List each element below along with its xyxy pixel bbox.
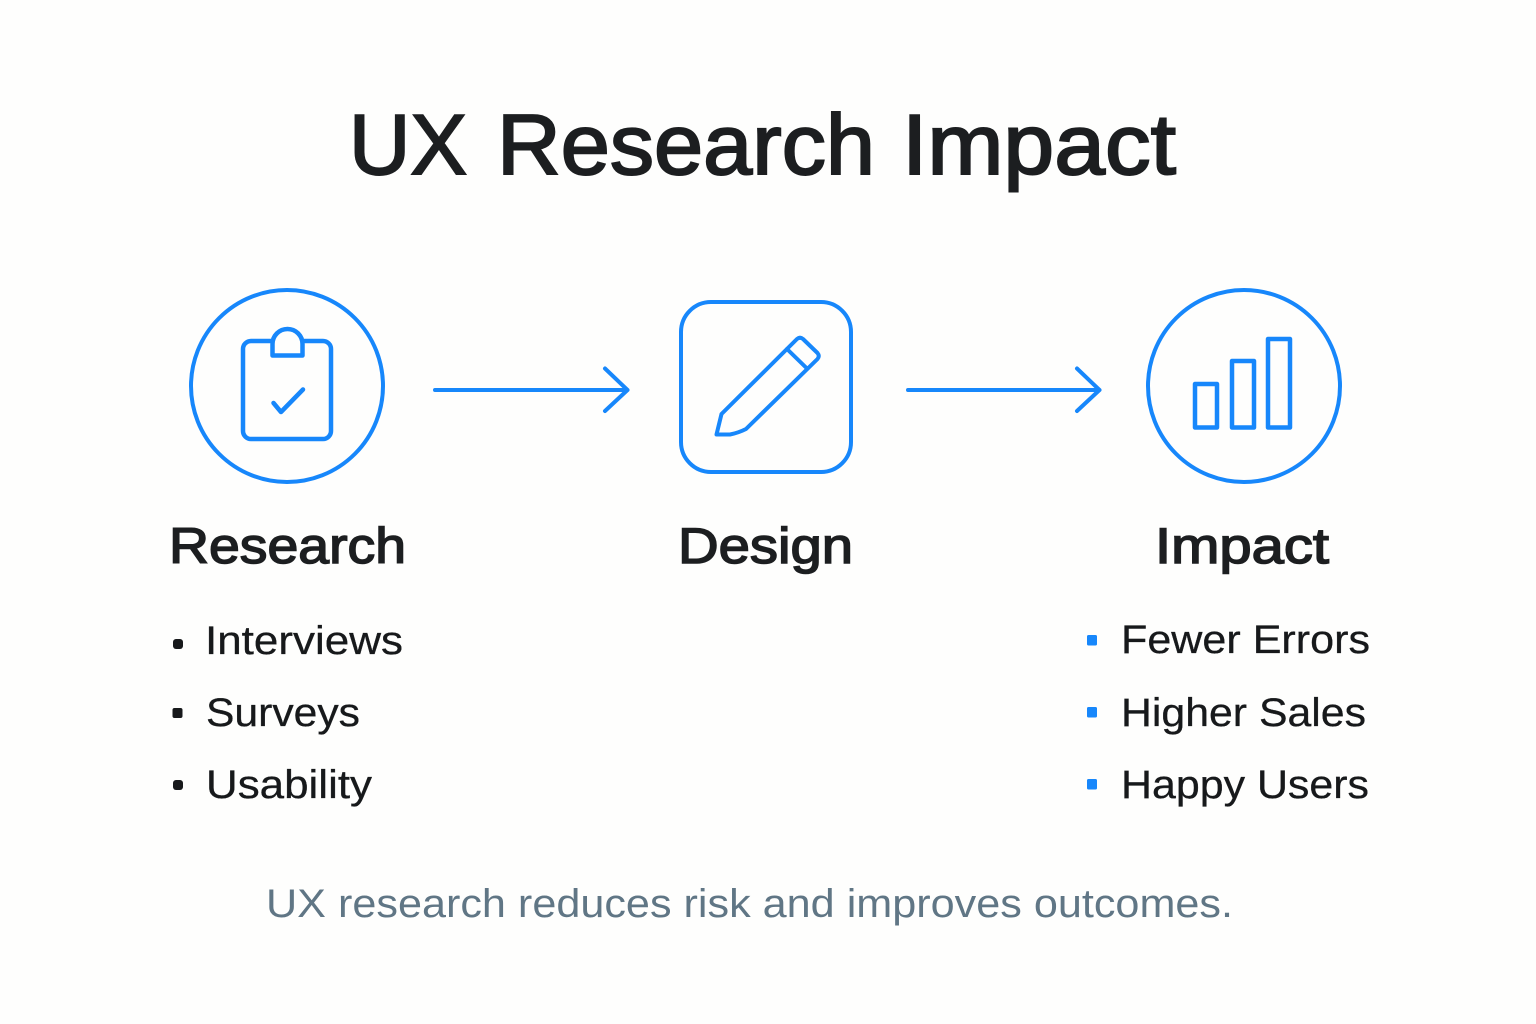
list: impact outcomes: Higher Sales: [1121, 691, 1366, 735]
heading: design: Design: [678, 518, 853, 574]
arrow: research to design: [435, 368, 628, 411]
list: research methods: Interviews: [205, 619, 403, 663]
title: UX: [349, 98, 467, 193]
arrow: design to impact: [908, 368, 1100, 411]
heading: impact: Impact: [1155, 518, 1329, 574]
heading: research: Research: [169, 518, 406, 574]
title: [349, 98, 1176, 193]
list: research methods: Usability: [206, 763, 372, 807]
footer statement: UX research reduces risk and improves outcomes.: [266, 882, 1233, 926]
list: impact outcomes: [1087, 618, 1370, 807]
icon: design pencil in rounded square: [681, 302, 851, 472]
icon: impact bar chart in circle: [1148, 290, 1340, 482]
list: impact outcomes: Fewer Errors: [1121, 618, 1370, 662]
title: Research: [497, 98, 875, 193]
list: impact outcomes: Happy Users: [1121, 763, 1369, 807]
icon: research clipboard in circle: [191, 290, 383, 482]
list: research methods: Surveys: [206, 691, 360, 735]
list: research methods: [172, 619, 403, 807]
title: Impact: [902, 98, 1176, 193]
